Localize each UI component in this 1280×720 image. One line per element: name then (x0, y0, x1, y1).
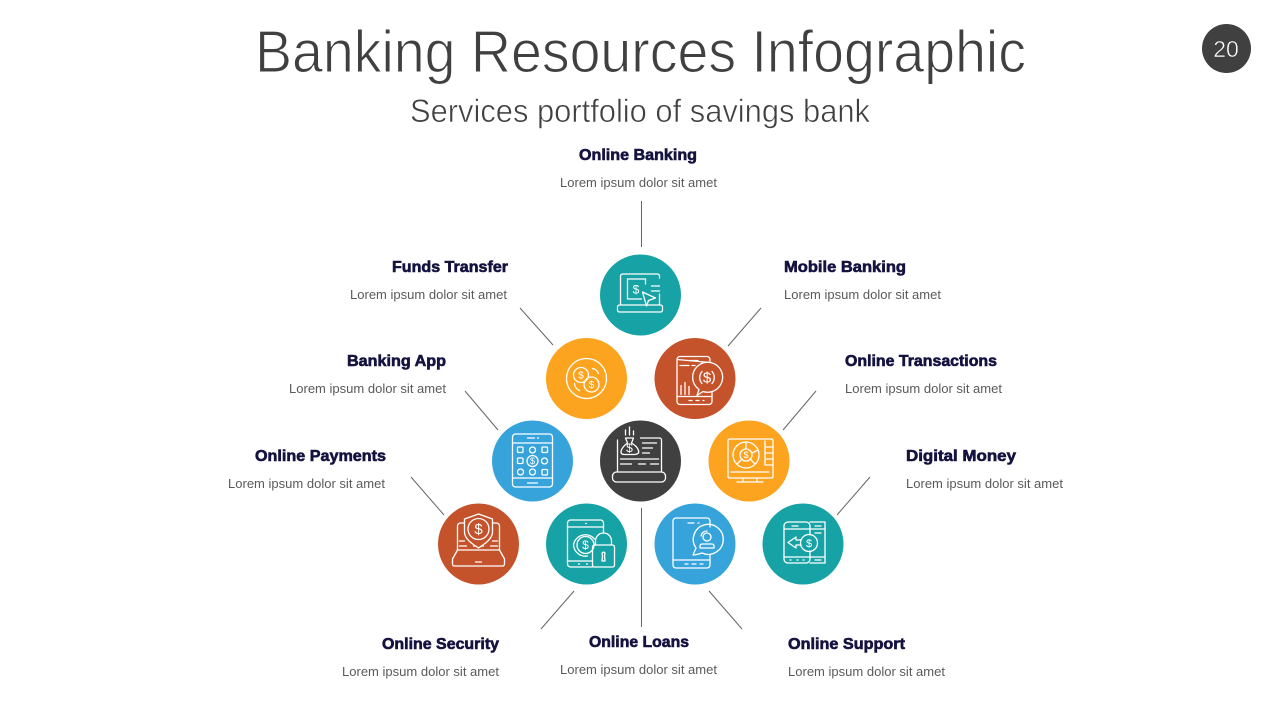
subtitle: Services portfolio of savings bank (410, 93, 871, 129)
label: Online Loans: Online Loans (589, 634, 689, 651)
label: Online Support (788, 636, 946, 679)
icon circle: mobile banking phone (654, 338, 736, 419)
page number badge: 20 (1213, 36, 1239, 62)
label: Banking App: Lorem ipsum dolor sit amet (289, 382, 447, 396)
label: Online Support: Online Support (788, 636, 905, 653)
label: Online Support: Lorem ipsum dolor sit amet (788, 665, 946, 679)
label: Banking App: Banking App (347, 353, 446, 370)
icon circle: funds transfer coins (546, 338, 627, 419)
page number badge (1202, 24, 1251, 73)
label: Online Payments: Lorem ipsum dolor sit amet (228, 477, 386, 491)
icon circle: online transactions monitor (708, 420, 790, 502)
label: Online Payments: Online Payments (255, 448, 386, 465)
icon circle: digital money phones: $ (806, 538, 812, 550)
icon circle: central money bag laptop (600, 420, 681, 502)
label: Online Payments (228, 448, 386, 491)
label: Digital Money: Digital Money (906, 448, 1016, 465)
label: Online Security: Lorem ipsum dolor sit amet (342, 665, 500, 679)
label: Online Transactions (845, 353, 1003, 396)
label: Online Banking: Lorem ipsum dolor sit amet (560, 176, 718, 190)
label: Online Loans: Lorem ipsum dolor sit amet (560, 663, 718, 677)
icon circle: online banking laptop: $ (633, 282, 640, 296)
label: Funds Transfer (350, 259, 508, 302)
label: Digital Money: Lorem ipsum dolor sit amet (906, 477, 1064, 491)
icon circle: mobile banking phone: $ (703, 370, 712, 386)
label: Mobile Banking: Mobile Banking (784, 259, 906, 276)
label: Funds Transfer: Funds Transfer (392, 259, 508, 276)
label: Online Banking: Online Banking (579, 147, 697, 164)
label: Mobile Banking: Lorem ipsum dolor sit amet (784, 288, 942, 302)
icon circle: digital money phones (762, 504, 844, 584)
label: Mobile Banking (784, 259, 942, 302)
icon circle: online banking laptop (600, 254, 681, 336)
label: Online Banking (560, 147, 718, 190)
label: Banking App (289, 353, 447, 396)
label: Online Transactions: Lorem ipsum dolor sit amet (845, 382, 1003, 396)
icon circle: online security tablet and lock: $ (582, 538, 589, 552)
title: Banking Resources Infographic (255, 19, 1026, 85)
label: Online Security: Online Security (382, 636, 499, 653)
connector lines (411, 201, 870, 629)
icon circle: banking app tablet (492, 420, 573, 502)
icon circle: online support phone (654, 504, 736, 584)
label: Funds Transfer: Lorem ipsum dolor sit amet (350, 288, 508, 302)
label: Online Transactions: Online Transactions (845, 353, 997, 370)
label: Online Loans (560, 634, 718, 677)
icon circle: online transactions monitor: $ (743, 450, 749, 460)
icon circle: banking app tablet: $ (530, 456, 535, 466)
icon circle: funds transfer coins: $ (578, 370, 584, 382)
label: Online Security (342, 636, 500, 679)
icon circle: central money bag laptop: $ (626, 441, 633, 455)
icon circle: online payments shield laptop (438, 504, 519, 584)
icon circle: funds transfer coins: $ (589, 380, 595, 391)
icon circle: online payments shield laptop: $ (474, 521, 483, 538)
icon circle: online security tablet and lock (546, 504, 627, 584)
label: Digital Money (906, 448, 1064, 491)
